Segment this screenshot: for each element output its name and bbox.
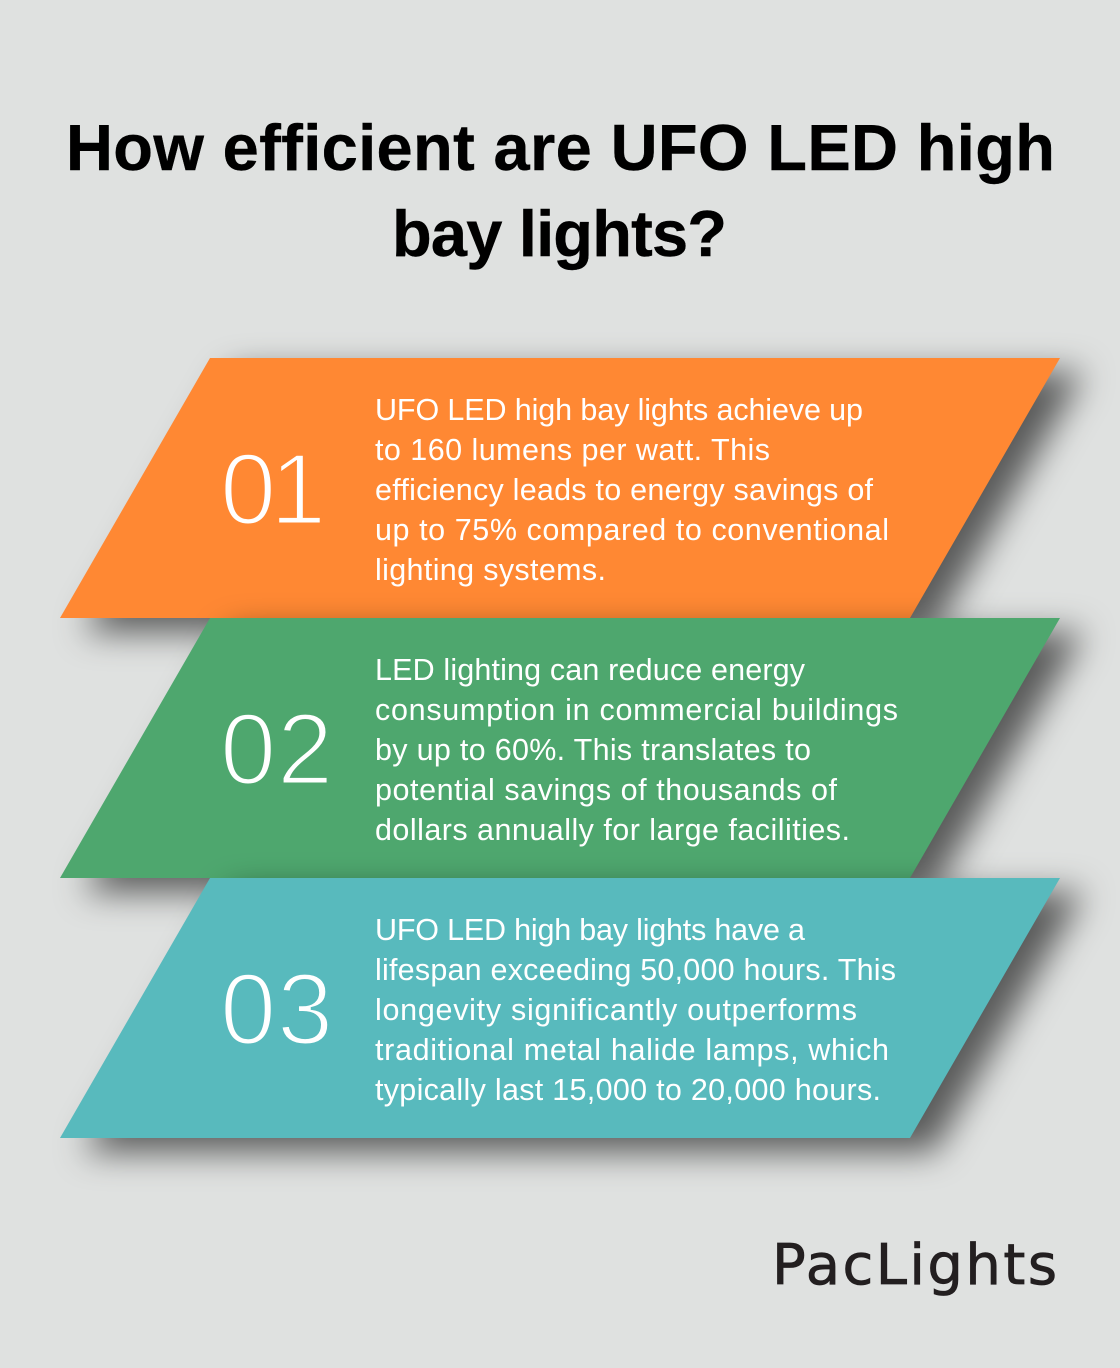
logo: PacLights: PacLights [772, 1233, 1057, 1298]
step 01 text: lighting systems. [375, 553, 606, 587]
panel: step 01 [60, 358, 1084, 632]
step 01 text: up to 75% compared to conventional [375, 513, 889, 547]
step 01 text: UFO LED high bay lights achieve up [375, 393, 863, 427]
step 03 text [375, 913, 896, 1107]
step 03 text: lifespan exceeding 50,000 hours. This [375, 953, 896, 987]
step 02 text: potential savings of thousands of [375, 773, 838, 807]
title [66, 111, 1055, 270]
step 01 text: efficiency leads to energy savings of [375, 473, 874, 507]
step number 02: 02 [220, 694, 333, 806]
step 02 text [375, 653, 898, 847]
step 03 text: UFO LED high bay lights have a [375, 913, 805, 947]
step number 03: 03 [220, 954, 333, 1066]
step 02 text: consumption in commercial buildings [375, 693, 898, 727]
step 01 text [375, 393, 889, 587]
title: bay lights? [392, 197, 727, 270]
panel: step 02 [60, 618, 1084, 892]
step 02 text: LED lighting can reduce energy [375, 653, 806, 687]
step 02 text: by up to 60%. This translates to [375, 733, 811, 767]
step number 01: 01 [220, 434, 326, 546]
panel: step 03 [60, 878, 1084, 1152]
step 03 text: longevity significantly outperforms [375, 993, 857, 1027]
step 01 text: to 160 lumens per watt. This [375, 433, 770, 467]
step 03 text: typically last 15,000 to 20,000 hours. [375, 1073, 881, 1107]
step 02 text: dollars annually for large facilities. [375, 813, 850, 847]
step 03 text: traditional metal halide lamps, which [375, 1033, 889, 1067]
title: How efficient are UFO LED high [66, 111, 1055, 184]
